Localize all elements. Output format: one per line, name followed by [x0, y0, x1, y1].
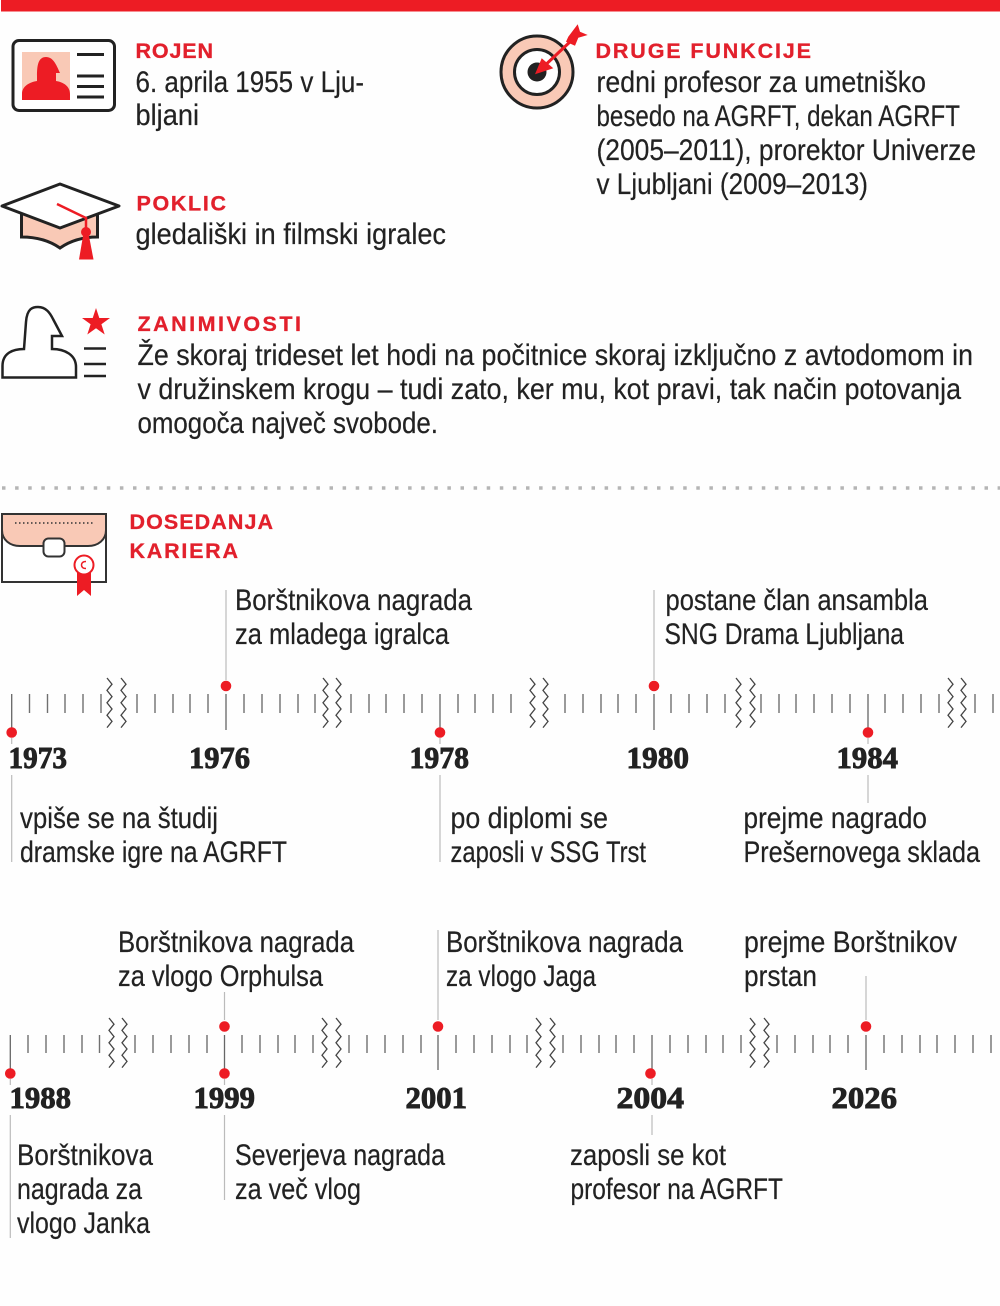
panel: druge funkcije — [501, 24, 976, 201]
label: 1999 upper: za vlogo Orphulsa — [118, 960, 323, 993]
label: 1973: dramske igre na AGRFT — [20, 836, 287, 869]
text: zanimivosti: omogoča največ svobode. — [138, 407, 438, 440]
connector lines — [12, 590, 868, 862]
label: 1988: vlogo Janka — [17, 1207, 150, 1240]
timeline ticks — [30, 694, 993, 713]
label: 1980: SNG Drama Ljubljana — [664, 618, 904, 651]
panel: dosedanja kariera heading — [2, 510, 273, 596]
label: 2026: prejme Borštnikov — [744, 926, 957, 959]
years: 1976 — [189, 740, 250, 775]
years — [10, 1080, 897, 1115]
icon: person with star — [2, 307, 110, 378]
connector lines — [10, 930, 866, 1238]
label: 2004: profesor na AGRFT — [570, 1173, 783, 1206]
heading: dosedanja kariera: KARIERA — [130, 539, 238, 563]
text: rojen: 6. aprila 1955 v Lju- — [136, 66, 364, 99]
label: 1984: prejme nagrado — [744, 802, 927, 835]
dotted divider — [2, 486, 1000, 490]
years: 1984 — [836, 740, 898, 775]
years: 2004 — [616, 1080, 684, 1115]
label: 2026: prstan — [744, 960, 817, 993]
label: 1988: Borštnikova — [17, 1139, 153, 1172]
icon: graduation cap — [2, 184, 119, 260]
major ticks — [12, 694, 868, 730]
panel: timeline row one — [6, 584, 993, 869]
label: 1999 upper: Borštnikova nagrada — [118, 926, 354, 959]
text: druge funkcije: redni profesor za umetniško — [596, 66, 926, 99]
top red bar — [1, 0, 1000, 12]
label: 1999 lower: Severjeva nagrada — [235, 1139, 445, 1172]
heading: druge funkcije: DRUGE FUNKCIJE — [596, 39, 811, 63]
years: 2001 — [406, 1080, 467, 1115]
panel: timeline row two — [5, 926, 991, 1240]
label: 1978: po diplomi se — [450, 802, 608, 835]
event dots — [5, 1021, 871, 1079]
years — [8, 740, 898, 775]
panel: zanimivosti — [2, 307, 973, 440]
label: 1976: Borštnikova nagrada — [235, 584, 472, 617]
years: 1980 — [626, 740, 689, 775]
label: 2001: Borštnikova nagrada — [446, 926, 683, 959]
label: 2004: zaposli se kot — [570, 1139, 727, 1172]
years: 2026 — [832, 1080, 897, 1115]
text: rojen: bljani — [136, 99, 199, 132]
label: 1988: nagrada za — [17, 1173, 142, 1206]
icon: target with arrow — [501, 24, 588, 108]
label: 2001: za vlogo Jaga — [446, 960, 596, 993]
label: 1999 lower: za več vlog — [235, 1173, 361, 1206]
label: 1980: postane član ansambla — [666, 584, 928, 617]
heading: dosedanja kariera: DOSEDANJA — [130, 510, 273, 534]
panel: poklic — [2, 184, 446, 260]
axis breaks — [109, 1018, 769, 1068]
text: druge funkcije: v Ljubljani (2009–2013) — [596, 168, 868, 201]
event dots — [6, 681, 873, 738]
icon: briefcase with medal — [2, 514, 106, 596]
label: 1978: zaposli v SSG Trst — [450, 836, 647, 869]
years: 1973 — [8, 740, 67, 775]
text: poklic: gledališki in filmski igralec — [136, 218, 446, 251]
label: 1973: vpiše se na študij — [20, 802, 218, 835]
years: 1988 — [10, 1080, 71, 1115]
label: 1976: za mladega igralca — [235, 618, 449, 651]
years: 1978 — [410, 740, 469, 775]
timeline ticks — [28, 1035, 991, 1053]
panel: rojen — [13, 39, 364, 132]
axis breaks — [107, 678, 966, 728]
icon: id card — [13, 40, 114, 110]
years: 1999 — [194, 1080, 255, 1115]
heading: zanimivosti: ZANIMIVOSTI — [138, 312, 301, 336]
heading: rojen: ROJEN — [136, 39, 213, 63]
heading: poklic: POKLIC — [136, 192, 226, 216]
major ticks — [10, 1035, 866, 1070]
